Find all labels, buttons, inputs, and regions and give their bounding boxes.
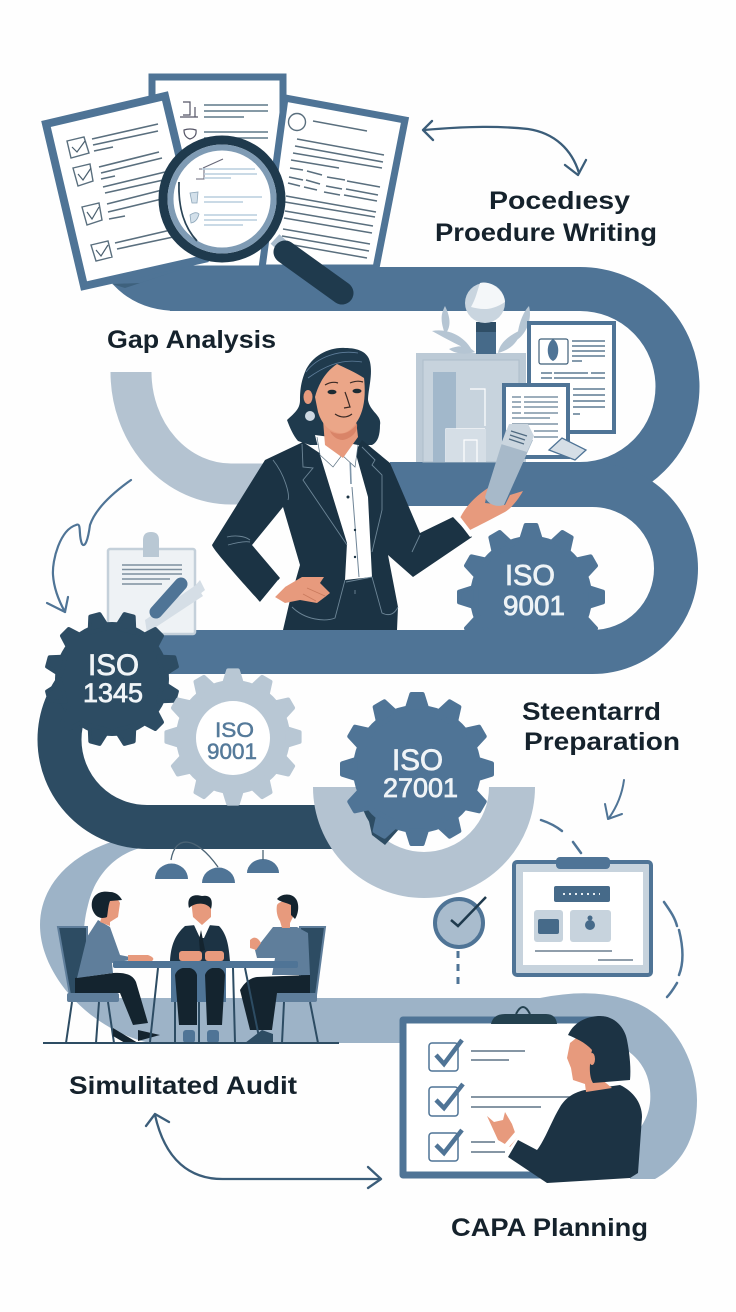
label: Procedure <box>435 187 657 247</box>
label: Standard Preparation <box>522 698 680 756</box>
check items <box>429 1043 458 1161</box>
icon: large clipboard checklist <box>403 1007 601 1175</box>
path band: light half ring <box>336 787 512 875</box>
label: Standard Preparation: Steentarrd <box>522 698 661 726</box>
jacket lapel lines <box>227 444 420 620</box>
label: Gap Analysis: Gap Analysis <box>107 326 276 354</box>
path band: dark lower-left turn <box>59 652 375 827</box>
path band: upper loop <box>110 267 678 484</box>
ear and earring <box>304 390 312 404</box>
path band: light curve from gap analysis <box>131 372 330 484</box>
arrow: bottom curved <box>146 1114 381 1188</box>
table <box>113 961 298 1042</box>
person: right <box>240 894 310 1043</box>
gear: ISO 9001 blue: ISO <box>505 560 555 592</box>
icon: clipboard note with pen <box>108 532 205 634</box>
document: small sheet <box>504 385 568 457</box>
arrow: left curved <box>47 480 131 612</box>
person: left <box>75 892 160 1043</box>
document: report <box>529 323 614 432</box>
gear: ISO 9001 light: 9001 <box>207 739 257 764</box>
gear: ISO 27001: 27001 <box>383 773 458 803</box>
icon: clock check <box>435 897 486 985</box>
hair <box>287 348 380 445</box>
label: Standard Preparation: Preparation <box>524 728 680 756</box>
icon: dashboard panel <box>514 857 651 975</box>
dashed arcs around dashboard <box>541 820 682 997</box>
label: Simulated Audit: Simulitated Audit <box>69 1072 298 1100</box>
label: CAPA Planning: CAPA Planning <box>451 1214 648 1242</box>
lower hand <box>275 577 330 603</box>
face features <box>325 381 363 417</box>
label: Procedure: Proedure Writing <box>435 219 657 247</box>
gear: ISO 9001 light <box>166 670 300 804</box>
jacket <box>212 440 472 630</box>
gear: ISO 1345 dark <box>31 598 193 760</box>
gear: ISO 9001 blue <box>459 525 603 669</box>
document: centre checklist <box>152 77 283 269</box>
figure: presenter woman <box>212 348 534 630</box>
person: centre <box>170 895 230 1043</box>
arrow: small down <box>605 780 624 819</box>
raised hand <box>460 488 523 530</box>
gear: ISO 1345 dark: ISO <box>88 649 139 682</box>
gear: ISO 1345 dark: 1345 <box>83 678 143 708</box>
gear: ISO 27001 <box>342 694 492 844</box>
bottle <box>485 424 534 506</box>
path band: second loop <box>130 485 676 652</box>
label: Procedure: Pocedıesy <box>489 187 630 215</box>
gear: ISO 27001: ISO <box>392 744 443 777</box>
document: left checklist <box>46 96 204 286</box>
document: right text page <box>262 98 405 268</box>
chairs <box>58 927 87 995</box>
lamps <box>155 842 279 883</box>
neck and face <box>323 420 358 458</box>
shirt <box>315 435 372 580</box>
gear: ISO 9001 blue: 9001 <box>503 590 565 621</box>
floor line <box>43 1042 339 1044</box>
figure: woman at clipboard <box>487 1016 642 1183</box>
meeting scene <box>43 892 339 1044</box>
gear: ISO 9001 light: ISO <box>215 719 254 742</box>
path band: light lower section <box>40 833 697 1179</box>
arrow: top right <box>423 121 586 175</box>
icon: documents and magnifier <box>46 77 405 293</box>
icon: magnifying glass <box>163 140 342 293</box>
illustration: cabinet and documents <box>416 283 614 462</box>
